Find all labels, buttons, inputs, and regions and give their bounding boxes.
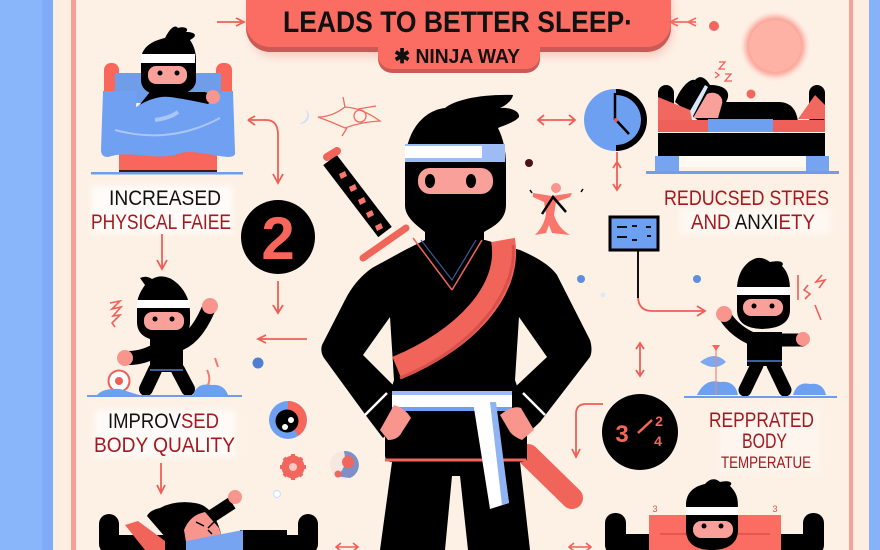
icons: small blue dots upper right <box>577 275 701 298</box>
icon: blue dot <box>252 358 264 368</box>
text block: improved body quality: BODY QUALITY <box>94 434 235 457</box>
text block: regulated body temperature: TEMPERATUE <box>721 453 811 472</box>
text block: reduced stress and anxiety: AND ANXIETY <box>691 211 815 234</box>
icon: crescent <box>299 109 309 124</box>
icon: small red dot top right <box>709 21 719 31</box>
icon: donut eye chart <box>269 401 307 439</box>
icon: clock <box>584 89 647 151</box>
title banner: ✱ NINJA WAY <box>394 46 521 68</box>
body and legs <box>321 240 592 550</box>
arrows around title <box>217 18 696 26</box>
illustration: bottom-right ninja in bed: 3 <box>772 504 778 514</box>
title banner: LEADS TO BETTER SLEEP· <box>283 6 633 39</box>
arrows right column <box>572 343 644 457</box>
illustration: right ninja stretching <box>684 258 837 398</box>
icon: small stretching figure <box>530 183 583 235</box>
text block: regulated body temperature: BODY <box>742 430 787 453</box>
red sash <box>397 240 504 368</box>
illustration: sleeping ninja in bed, reduced stress <box>646 62 839 174</box>
title banner <box>246 0 672 73</box>
main figure: large ninja <box>321 95 592 550</box>
icon: chart board on stem with arrow <box>610 217 705 316</box>
arrows left column <box>157 281 307 493</box>
text block: reduced stress and anxiety: REDUCSED STRES <box>664 187 829 210</box>
number badge: 3 / 2 / 4 <box>602 394 678 470</box>
text block: regulated body temperature <box>709 409 820 472</box>
hands <box>380 405 411 440</box>
text block: reduced stress and anxiety <box>664 187 830 234</box>
katana scabbard <box>528 455 572 498</box>
text block: increased physical fatigue: PHYSICAL FAIEE <box>91 211 231 234</box>
icon: small circle outline <box>274 490 280 498</box>
text block: regulated body temperature: REPPRATED <box>709 409 814 432</box>
illustration: ninja in bed with blue blanket <box>91 26 243 174</box>
illustration: bottom-left ninja in bed <box>99 490 318 550</box>
illustration: bottom-right ninja in bed: 3 <box>652 504 658 514</box>
icon: small splat near head <box>525 159 533 167</box>
head with hair <box>405 95 519 262</box>
number badge: 3 / 2 / 4: 2 <box>655 413 663 429</box>
number badge: 3 / 2 / 4: 4 <box>654 433 662 449</box>
katana handle <box>327 151 406 258</box>
illustration: left ninja stretching <box>87 276 242 397</box>
arrow: bottom right double arrow <box>569 543 591 550</box>
icon: eye outline <box>318 97 380 136</box>
collar <box>413 238 482 290</box>
belt <box>392 391 512 411</box>
number badge: 2 <box>241 200 315 274</box>
icon: gear <box>280 454 306 480</box>
icon: sun <box>745 16 805 76</box>
arrows near clock <box>538 115 621 190</box>
arrow: small double arrow bottom <box>336 543 358 550</box>
number badge: 2: 2 <box>261 205 295 272</box>
text block: improved body quality: IMPROVSED <box>108 410 219 433</box>
arrow: blanket to number 2 <box>157 116 283 269</box>
text block: increased physical fatigue: INCREASED <box>109 187 221 210</box>
number badge: 3 / 2 / 4: 3 <box>615 421 629 448</box>
text block: improved body quality <box>94 410 235 457</box>
text block: increased physical fatigue <box>91 186 232 234</box>
illustration: bottom-right ninja in bed <box>605 479 824 550</box>
icon: small sphere <box>330 451 359 479</box>
